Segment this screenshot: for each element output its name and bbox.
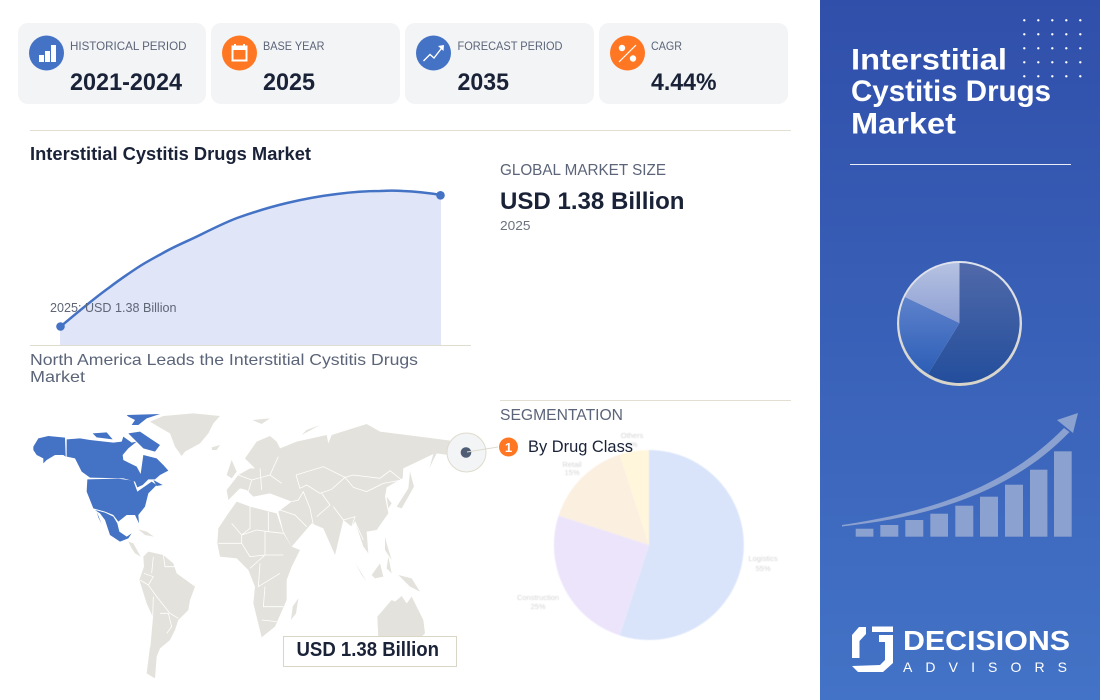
icon: bar chart [29,36,64,70]
stat card: historical period: HISTORICAL PERIOD [70,39,187,53]
icon: growth bars and arrow [842,413,1078,537]
decorative dot grid [1023,19,1082,78]
icon: calendar [222,36,257,70]
map heading [30,352,418,386]
chart data label: 2025: USD 1.38 Billion [50,301,177,315]
logo: Decisions Advisors: DECISIONS [903,625,1070,656]
chart heading: Interstitial Cystitis Drugs Market [30,144,311,164]
pie labels: Logistics [748,554,778,563]
map callout marker [447,433,498,472]
banner title: Market [851,108,956,140]
segment item: By Drug Class: 1 [505,440,512,455]
logo mark [852,626,893,672]
area chart: market size [50,191,445,345]
map heading: Market [30,369,86,386]
pie labels [517,431,778,611]
banner title: Interstitial [851,44,1007,76]
map value label [284,636,456,666]
Americas grey land and Greenland [128,413,220,678]
banner title [851,44,1051,140]
segment item: By Drug Class: By Drug Class [528,438,633,456]
global market size block: 2025 [500,218,530,233]
pie labels: 25% [530,602,546,611]
pie labels: Construction [517,593,559,602]
pie labels: Retail [562,460,582,469]
stat card: base year: 2025 [263,69,315,96]
banner title: Cystitis Drugs [851,75,1051,108]
map heading: North America Leads the Interstitial Cystitis Drugs [30,352,418,369]
stat card: base year: BASE YEAR [263,39,325,53]
icon: pie chart [897,261,1022,386]
stat card: CAGR [599,23,788,104]
stat card: CAGR: CAGR [651,39,682,53]
Eurasia, Africa and Oceania grey land [217,418,450,638]
stat card: CAGR: 4.44% [651,69,716,96]
stat card: forecast period [405,23,594,104]
map value label: USD 1.38 Billion [296,639,439,661]
global market size block: USD 1.38 Billion [500,188,684,215]
icon: trend arrow [416,36,451,70]
pie labels: 15% [564,468,580,477]
global market size block: GLOBAL MARKET SIZE [500,162,666,179]
stat card: base year [211,23,400,104]
logo: Decisions Advisors: ADVISORS [903,659,1067,675]
icon: percent [610,36,645,70]
pie labels: 5% [627,440,638,449]
segment pie chart [517,431,778,640]
global market size block [500,162,684,233]
highlighted region: North America [33,414,168,542]
stat card: historical period [18,23,206,104]
panel: side banner [820,0,1100,700]
stat card: historical period: 2021-2024 [70,69,183,96]
segmentation heading: SEGMENTATION [500,407,623,424]
pie labels: 55% [755,564,771,573]
stat card: forecast period: FORECAST PERIOD [458,39,563,53]
stat card: forecast period: 2035 [458,69,509,96]
world map [33,413,498,678]
logo: Decisions Advisors [852,625,1070,675]
pie labels: Others [621,431,643,440]
